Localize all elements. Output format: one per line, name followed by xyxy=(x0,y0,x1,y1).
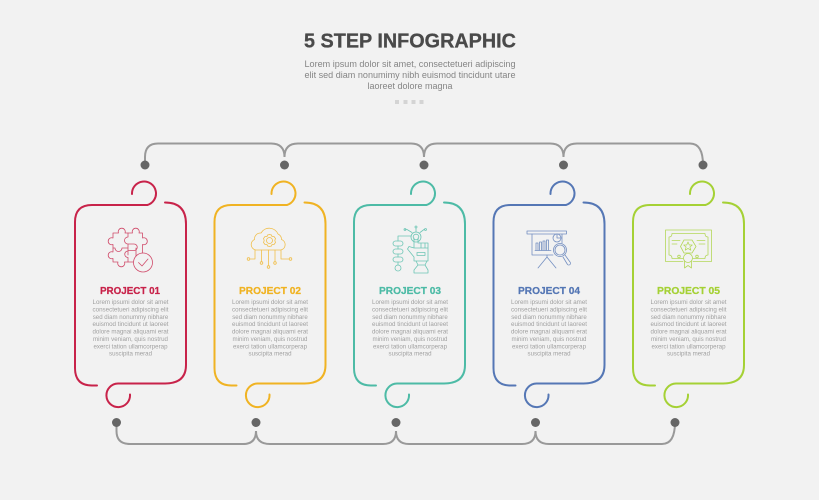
project 02 text: PROJECT 02 xyxy=(239,286,301,297)
project 05 text xyxy=(650,286,727,358)
project 05 text: consectetueri adipiscing elit xyxy=(650,306,727,313)
card outline blue xyxy=(494,181,604,407)
project 05 text: dolore magnai aliquami erat xyxy=(650,328,727,336)
icon: presentation board xyxy=(527,231,571,268)
project 04 text: PROJECT 04 xyxy=(518,286,580,297)
title: 5 STEP INFOGRAPHIC xyxy=(304,30,516,52)
project 01 text xyxy=(92,286,169,358)
intro text xyxy=(304,59,516,91)
project 03 text: suscipita merad xyxy=(388,351,432,358)
intro text: Lorem ipsum dolor sit amet, consectetueri adipiscing xyxy=(304,59,516,69)
intro text: elit sed diam nonumimy nibh euismod tincidunt utare xyxy=(304,70,516,80)
card outline yellow xyxy=(214,181,326,407)
project 05 text: exerci tation ullamcorperap xyxy=(652,343,726,350)
panel: project 04 xyxy=(494,181,604,407)
project 01 text: Lorem ipsumi dolor sit amet xyxy=(92,299,169,306)
intro text: laoreet dolore magna xyxy=(368,81,453,91)
project 01 text: consectetueri adipiscing elit xyxy=(92,306,169,313)
project 02 text: Lorem ipsumi dolor sit amet xyxy=(232,299,308,306)
project 02 text: consectetueri adipiscing elit xyxy=(232,306,308,313)
project 04 text: exerci tation ullamcorperap xyxy=(512,343,586,350)
project 04 text xyxy=(511,286,587,358)
project 05 text: suscipita merad xyxy=(667,351,710,358)
project 05 text: euismod tincidunt ut laoreet xyxy=(650,321,727,328)
project 01 text: euismod tincidunt ut laoreet xyxy=(92,321,169,328)
panel: project 05 xyxy=(633,181,744,407)
project 03 text: sed diam nonummy nibhare xyxy=(372,314,448,321)
card outline red xyxy=(75,181,186,407)
project 01 text: exerci tation ullamcorperap xyxy=(94,343,168,350)
project 04 text: dolore magnai aliquami erat xyxy=(511,328,587,336)
icon: puzzle with check xyxy=(108,228,152,272)
project 04 text: consectetueri adipiscing elit xyxy=(511,306,587,313)
panel: project 01 xyxy=(75,181,186,407)
project 03 text: dolore magnai aliquami erat xyxy=(372,328,448,336)
project 05 text: Lorem ipsumi dolor sit amet xyxy=(650,299,727,306)
project 03 text: minim veniam, quis nostrud xyxy=(372,336,448,343)
project 05 text: minim veniam, quis nostrud xyxy=(651,336,726,343)
project 05 text: sed diam nonummy nibhare xyxy=(651,314,727,321)
project 01 text: sed diam nonummy nibhare xyxy=(93,314,169,321)
card outline teal xyxy=(354,181,465,407)
project 04 text: euismod tincidunt ut laoreet xyxy=(511,321,587,328)
icon: robot hand and flowchart xyxy=(393,226,428,273)
project 01 text: PROJECT 01 xyxy=(100,286,160,297)
project 01 text: minim veniam, quis nostrud xyxy=(93,336,168,343)
project 05 text: PROJECT 05 xyxy=(657,286,720,297)
icon: cloud network xyxy=(247,228,292,268)
project 02 text: sed diam nonummy nibhare xyxy=(232,314,308,321)
project 04 text: suscipita merad xyxy=(528,351,571,358)
project 03 text xyxy=(372,286,448,358)
project 04 text: Lorem ipsumi dolor sit amet xyxy=(511,299,587,306)
project 04 text: minim veniam, quis nostrud xyxy=(512,336,587,343)
panel: project 03 xyxy=(354,181,465,407)
project 03 text: exerci tation ullamcorperap xyxy=(373,343,447,350)
project 02 text xyxy=(232,286,308,358)
project 03 text: Lorem ipsumi dolor sit amet xyxy=(372,299,448,306)
project 01 text: suscipita merad xyxy=(109,351,152,358)
bottom connector xyxy=(112,418,680,444)
project 04 text: sed diam nonummy nibhare xyxy=(511,314,587,321)
project 03 text: euismod tincidunt ut laoreet xyxy=(372,321,448,328)
panel: project 02 xyxy=(214,181,326,407)
project 03 text: PROJECT 03 xyxy=(379,286,441,297)
top connector xyxy=(140,144,708,170)
card outline green xyxy=(633,181,744,407)
project 02 text: dolore magnai aliquami erat xyxy=(232,328,308,336)
pagination dots xyxy=(395,100,424,104)
project 02 text: exerci tation ullamcorperap xyxy=(233,343,307,350)
project 02 text: euismod tincidunt ut laoreet xyxy=(232,321,308,328)
project 02 text: suscipita merad xyxy=(248,351,292,358)
project 02 text: minim veniam, quis nostrud xyxy=(232,336,308,343)
icon: certificate xyxy=(666,230,712,268)
project 01 text: dolore magnai aliquami erat xyxy=(92,328,169,336)
project 03 text: consectetueri adipiscing elit xyxy=(372,306,448,313)
